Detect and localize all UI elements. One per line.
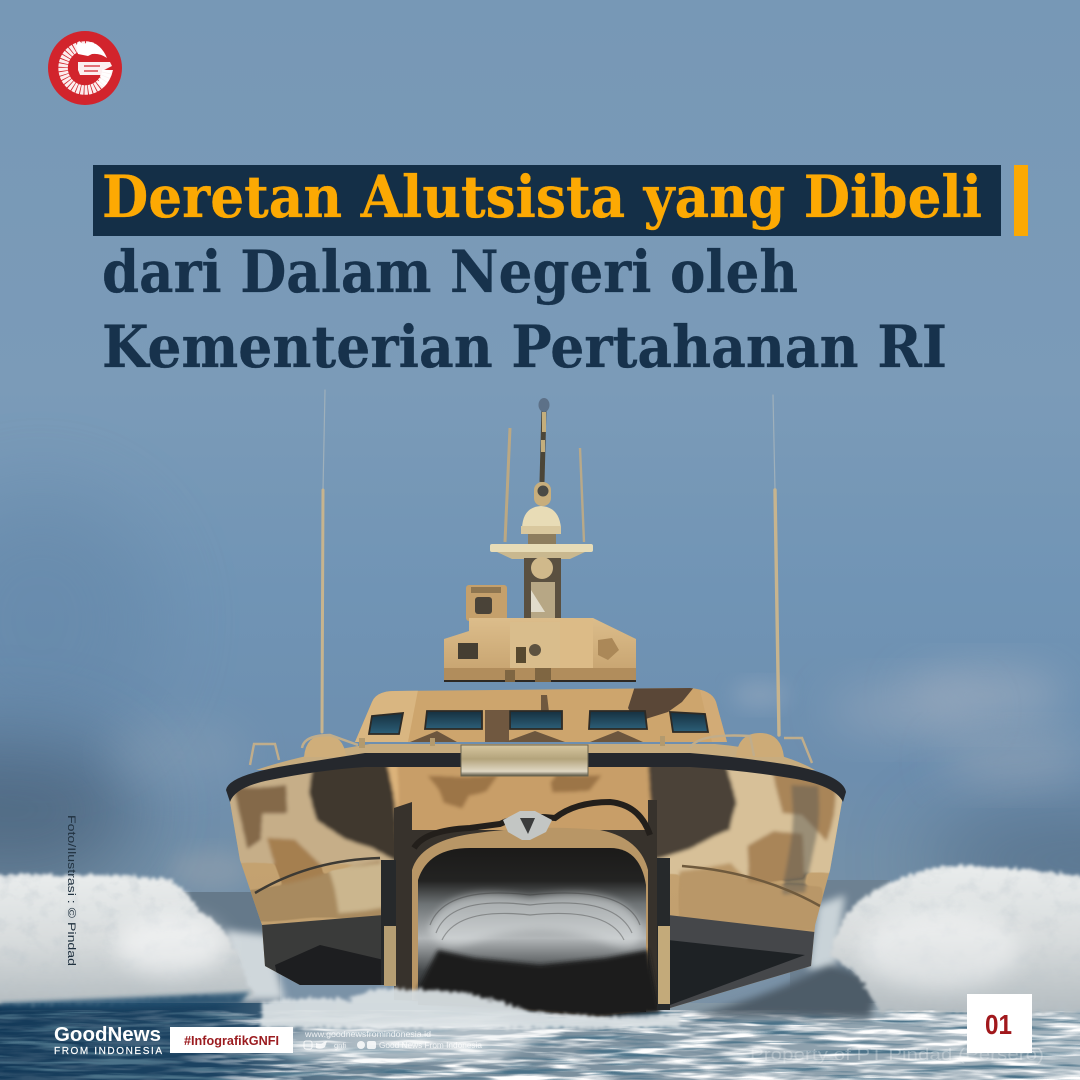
bow sensor	[503, 811, 552, 840]
page number: 01	[985, 1009, 1012, 1040]
footer: hashtag tag	[170, 1027, 293, 1053]
footer: GoodNews wordmark: FROM INDONESIA	[54, 1046, 162, 1057]
sea surface	[0, 880, 1080, 1080]
title highlight bar	[93, 165, 1001, 236]
footer: hashtag tag: #InfografikGNFI	[184, 1033, 279, 1048]
page number	[967, 994, 1032, 1053]
footer: social links: gnfi	[334, 1041, 346, 1050]
title line 3: Kementerian Pertahanan RI	[102, 313, 947, 381]
footer: social links: Good News From Indonesia	[379, 1041, 483, 1050]
sensor box	[466, 585, 507, 621]
title line 2: dari Dalam Negeri oleh	[102, 238, 798, 306]
boat	[210, 390, 860, 1018]
cabin windows	[369, 711, 708, 734]
right water spray	[690, 865, 1080, 1018]
bow wave foam	[240, 988, 680, 1060]
turret	[444, 618, 637, 686]
social icons	[304, 1041, 376, 1049]
watermark: Property of PT Pindad (Persero)	[750, 1045, 1044, 1064]
title block	[93, 163, 1028, 381]
title line 1: Deretan Alutsista yang Dibeli	[102, 163, 982, 231]
footer: GoodNews wordmark: GoodNews	[54, 1024, 161, 1046]
side antennas	[322, 390, 779, 735]
footer: social links: www.goodnewsfromindonesia.id	[304, 1030, 431, 1039]
photo credit: Foto/Ilustrasi : © Pindad	[65, 815, 77, 966]
cabin	[355, 688, 727, 742]
yellow accent bar	[1014, 165, 1028, 236]
left water spray	[0, 874, 255, 1008]
struts	[381, 858, 670, 1010]
deck rails and domes	[250, 733, 815, 770]
logo: GNFI red circle emblem	[48, 31, 122, 105]
hull	[230, 767, 842, 1016]
mast	[490, 398, 593, 618]
hull camouflage	[230, 767, 842, 930]
dark waterline bands	[262, 915, 384, 990]
bow plate	[461, 745, 588, 776]
footer: social links	[304, 1030, 483, 1050]
black gunwale rim	[226, 753, 846, 802]
footer: GoodNews wordmark	[54, 1024, 162, 1057]
tunnel	[394, 800, 660, 1018]
